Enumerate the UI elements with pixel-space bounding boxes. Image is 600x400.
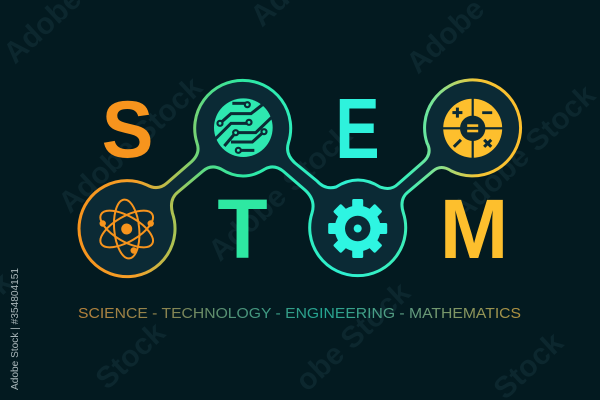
vertical credit: Adobe Stock | #354804151 <box>9 268 21 390</box>
icon: atom <box>95 199 158 259</box>
icon: circuit <box>214 98 273 157</box>
letter T: T <box>217 182 268 276</box>
watermarks: Stock <box>90 316 172 396</box>
tagline: SCIENCE - TECHNOLOGY - ENGINEERING - MATHEMATICS <box>78 306 521 322</box>
connected circle outline <box>79 80 521 277</box>
letter E: E <box>335 82 380 177</box>
letter S: S <box>102 84 153 174</box>
watermarks: Adobe Stock <box>52 70 209 220</box>
letter M: M <box>440 182 508 276</box>
icon: calculator symbols <box>443 98 503 158</box>
watermarks: Adobe Stock <box>445 78 600 228</box>
icon: gear <box>328 199 387 258</box>
watermarks: obe Stock <box>289 276 417 398</box>
watermarks: Adobe Stock <box>202 118 359 268</box>
